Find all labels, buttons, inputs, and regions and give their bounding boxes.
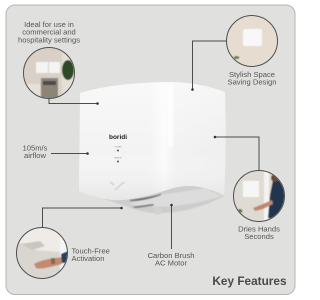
photo: washroom	[23, 47, 76, 99]
connector	[42, 208, 122, 227]
connector	[192, 41, 226, 90]
callout: carbon brush motor	[148, 204, 194, 268]
air outlet slot	[130, 194, 161, 201]
label: AC Motor	[155, 258, 188, 268]
heading text: commercial and	[22, 28, 76, 37]
indicator lights: POWER	[115, 146, 122, 148]
photo ring	[234, 170, 284, 222]
indicator lights: SENSOR	[114, 158, 122, 160]
photo ring	[226, 16, 278, 66]
photo ring	[24, 48, 74, 98]
label: Seconds	[244, 232, 274, 241]
callout: commercial and hospitality	[18, 20, 99, 105]
connector	[49, 98, 98, 104]
photo: hand under dryer	[16, 227, 68, 279]
connector	[215, 137, 259, 171]
dryer highlight	[168, 85, 173, 147]
callout: touch-free activation	[16, 207, 123, 279]
callout: airflow	[23, 144, 89, 160]
connector	[170, 205, 172, 249]
label: Saving Design	[228, 78, 276, 86]
label: Dries Hands	[238, 224, 280, 234]
callout: dries hands	[214, 136, 285, 241]
heading: key features: Key Features	[212, 274, 287, 288]
heading text: hospitality settings	[18, 35, 80, 44]
brand logo: boridi	[109, 134, 127, 141]
label: Touch-Free	[72, 246, 110, 256]
label: 105m/s	[23, 144, 48, 152]
label: Activation	[72, 254, 104, 263]
dryer shell	[79, 82, 226, 200]
product: hand dryer	[79, 82, 226, 215]
photo: man drying hands	[233, 170, 285, 222]
photo: wall-mounted dryer	[226, 15, 278, 67]
sensor nub	[154, 207, 162, 215]
callout: stylish space saving	[191, 15, 278, 91]
label: airflow	[24, 151, 46, 160]
photo ring	[16, 228, 68, 278]
hand icon	[110, 182, 124, 190]
indicator lights	[114, 146, 122, 162]
dryer lower scoop	[104, 184, 224, 213]
label: Stylish Space	[229, 70, 275, 79]
heading text: Ideal for use in	[24, 20, 74, 29]
connector	[51, 152, 88, 154]
label: Carbon Brush	[148, 251, 194, 260]
